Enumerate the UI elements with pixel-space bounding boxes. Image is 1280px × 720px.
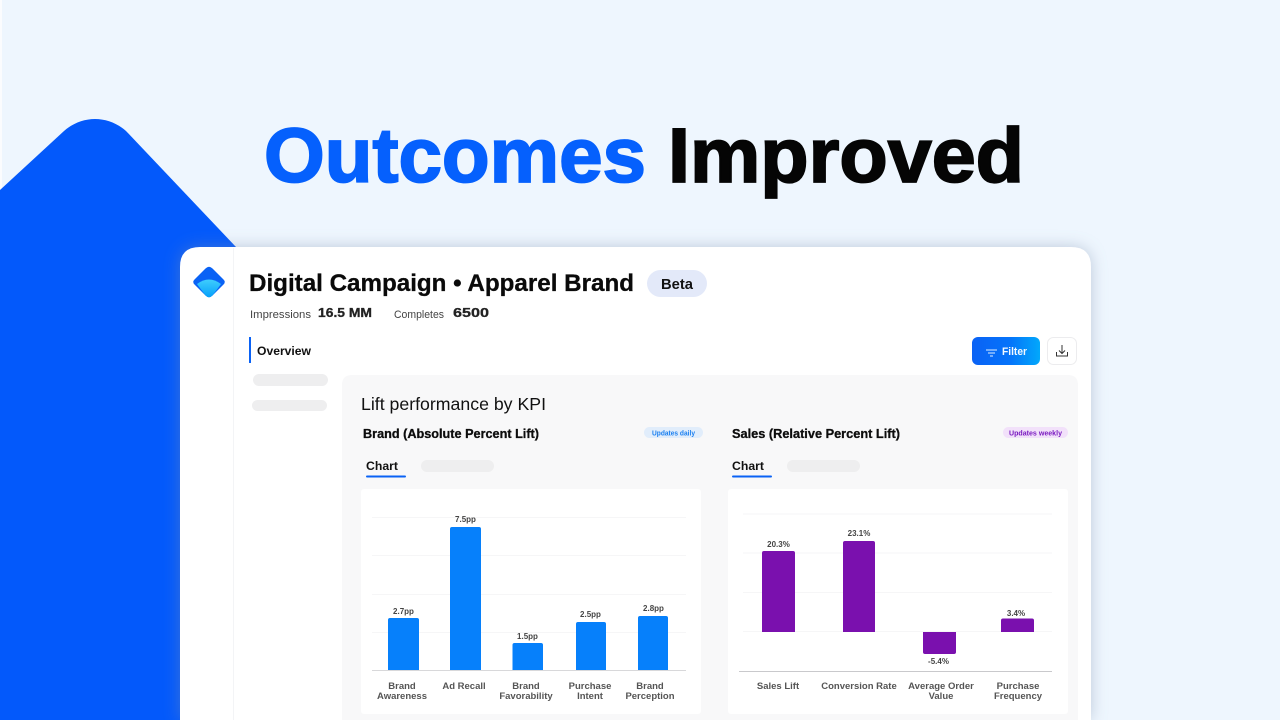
value labels: [393, 515, 664, 641]
category labels: Purchase: [997, 681, 1039, 692]
brand section header: Brand (Absolute Percent Lift): [363, 426, 539, 441]
category labels: Brand: [388, 681, 416, 692]
value labels: -5.4%: [928, 657, 949, 666]
sidebar divider: [233, 248, 234, 720]
sidebar navigation: Overview: [257, 344, 312, 358]
panel heading: Lift performance by KPI: [361, 394, 546, 414]
value labels: 23.1%: [848, 529, 870, 538]
category labels: Purchase: [569, 681, 611, 692]
category labels: Awareness: [377, 691, 427, 702]
bars: [762, 541, 1034, 654]
campaign stats: Impressions: [250, 309, 312, 321]
brand tabs: [366, 459, 494, 478]
icon: brand logo: [193, 267, 225, 297]
bar chart: sales: [728, 489, 1068, 714]
value labels: [767, 529, 1025, 666]
category labels: Conversion Rate: [821, 681, 897, 692]
panel: lift performance: [342, 375, 1078, 720]
sales tabs: Chart: [732, 459, 764, 473]
filter button: Filter: [1002, 346, 1028, 358]
filter button: [972, 337, 1040, 365]
value labels: 7.5pp: [455, 515, 476, 524]
brand section header: Updates daily: [652, 428, 696, 438]
category labels: Sales Lift: [757, 681, 800, 692]
value labels: 2.7pp: [393, 607, 414, 616]
brand section header: [363, 426, 703, 441]
campaign heading: Digital Campaign • Apparel Brand: [249, 270, 634, 297]
category labels: Value: [929, 691, 953, 702]
sales section header: Sales (Relative Percent Lift): [732, 426, 900, 441]
value labels: 2.8pp: [643, 604, 664, 613]
category labels: Intent: [577, 691, 604, 702]
sidebar navigation: [249, 337, 328, 411]
brand tabs: Chart: [366, 459, 398, 473]
beta badge: Beta: [661, 276, 694, 293]
campaign stats: [250, 305, 489, 321]
beta badge: [647, 270, 707, 297]
category labels: Ad Recall: [442, 681, 486, 692]
decorative blue diamond shape: [0, 119, 236, 720]
category labels: Brand: [512, 681, 540, 692]
category labels: [377, 681, 675, 702]
sales section header: Updates weekly: [1009, 428, 1063, 438]
bar chart: brand: [361, 489, 701, 714]
campaign stats: 6500: [453, 305, 489, 320]
value labels: 2.5pp: [580, 610, 601, 619]
category labels: Frequency: [994, 691, 1043, 702]
sales section header: [732, 426, 1068, 441]
value labels: 20.3%: [767, 540, 790, 549]
title: Outcomes: [264, 113, 646, 199]
left edge strip: [0, 0, 2, 190]
title: [264, 113, 1024, 199]
campaign stats: 16.5 MM: [318, 305, 372, 320]
category labels: Favorability: [499, 691, 553, 702]
value labels: 3.4%: [1007, 609, 1025, 618]
campaign stats: Completes: [394, 309, 444, 321]
title: Improved: [668, 113, 1024, 199]
sales tabs: [732, 459, 860, 478]
value labels: 1.5pp: [517, 632, 538, 641]
dashboard card: [180, 247, 1091, 720]
bars: [388, 527, 668, 670]
category labels: Perception: [625, 691, 675, 702]
category labels: [757, 681, 1043, 702]
icon: download button: [1048, 338, 1076, 364]
category labels: Average Order: [908, 681, 974, 692]
category labels: Brand: [636, 681, 664, 692]
